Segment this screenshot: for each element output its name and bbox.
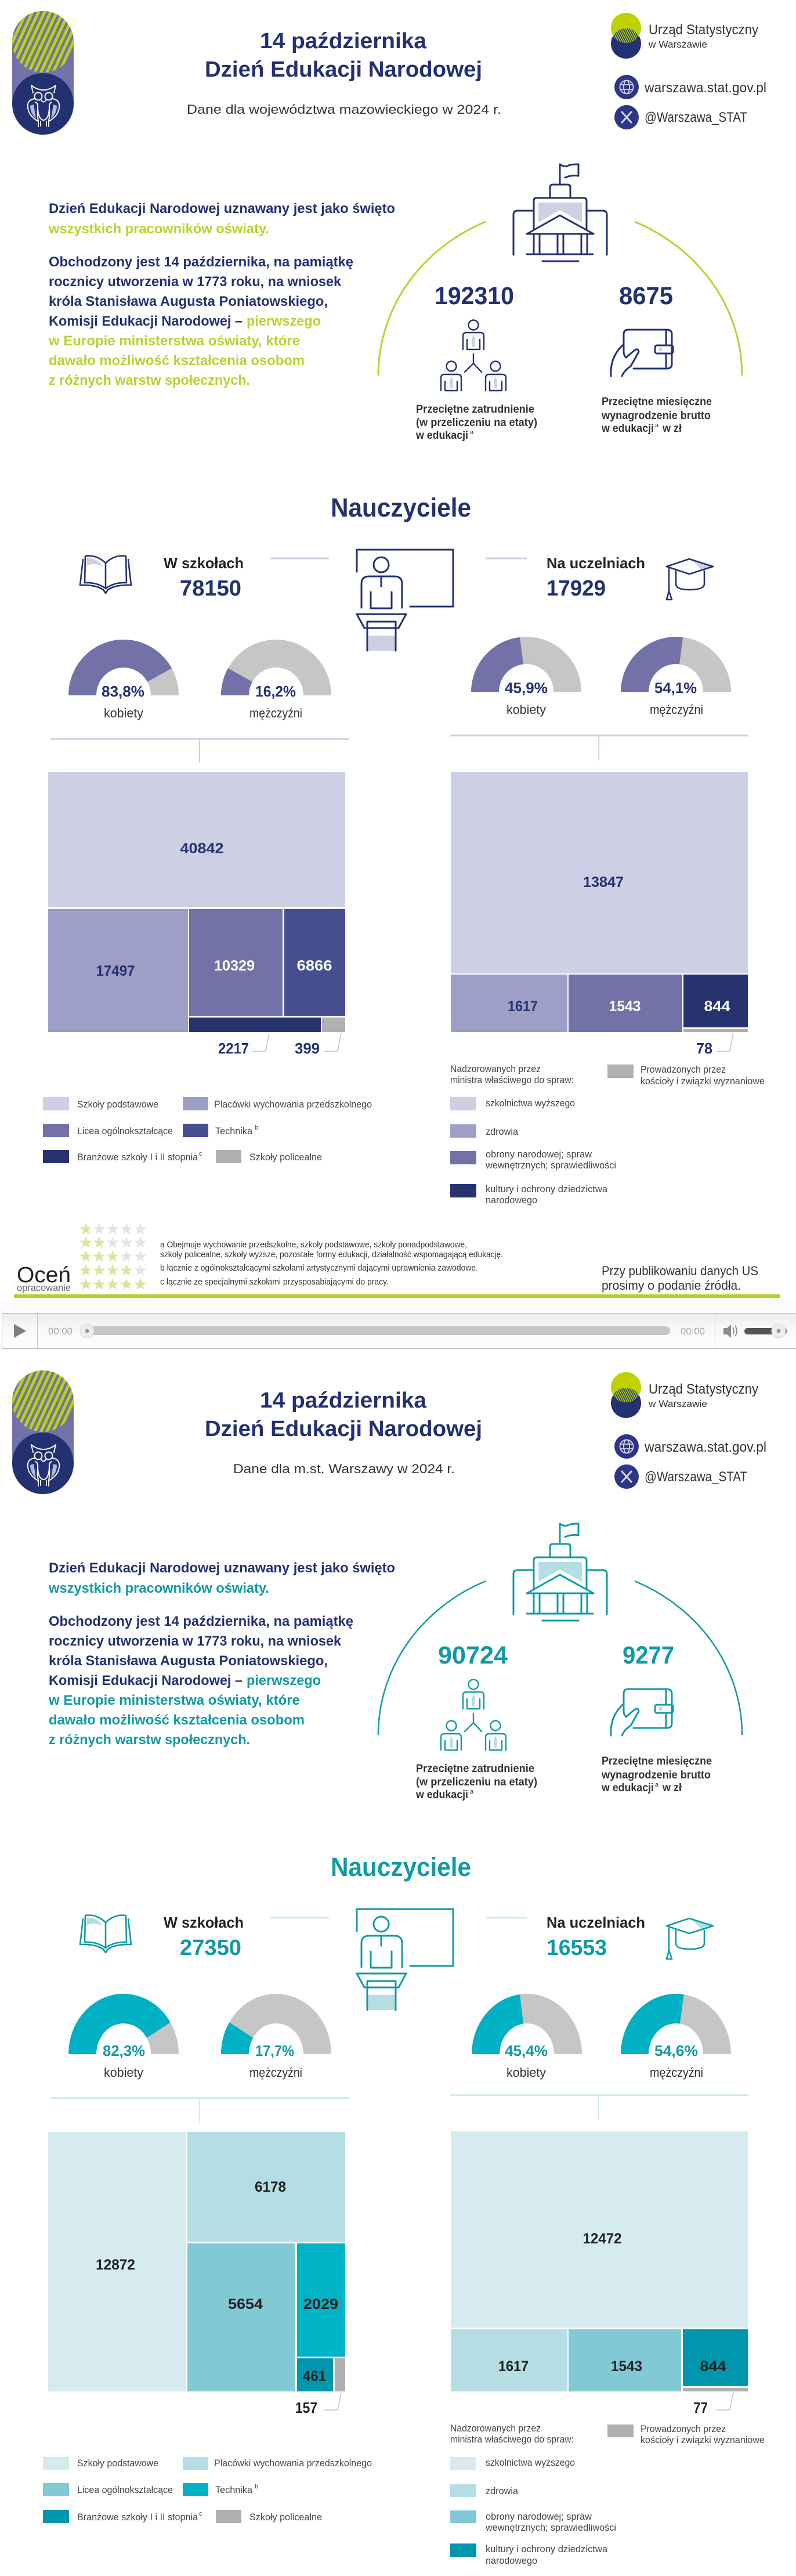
text block: intro: z różnych warstw społecznych. [49,373,250,388]
callout: 78: 78 [696,1040,712,1057]
legend: szkoły: Branżowe szkoły I i II stopnia [77,1152,198,1163]
legend: uczelnie: wewnętrznych; sprawiedliwości [485,1160,616,1171]
text block: intro: dawało możliwość kształcenia osobom [49,353,305,369]
icon: teacher at blackboard [357,1909,453,2010]
text block: intro [48,1560,395,1748]
icon: book [80,1915,131,1953]
gauge: kobiety uczelnie [471,637,581,717]
icon: book [80,556,131,593]
legend: szkoły: Szkoły podstawowe [77,2458,158,2469]
subtitle: Dane dla województwa mazowieckiego w 2024 r. [187,102,501,117]
legend: uczelnie: Nadzorowanych przez [450,1063,541,1074]
title: 14 października [260,29,427,53]
callout: 77 [693,2392,733,2416]
stat: W szkołach: 78150 [180,576,241,601]
stat: employment [415,282,537,442]
treemap: szkoły [48,2132,345,2391]
stat: employment: w edukacji [415,430,468,442]
legend: uczelnie: wewnętrznych; sprawiedliwości [485,2522,616,2533]
callout: 157 [295,2392,341,2416]
footnotes: a Obejmuje wychowanie przedszkolne, szkoły podstawowe, szkoły ponadpodstawowe, [160,1240,467,1250]
treemap: szkoły: 40842 [180,840,224,857]
legend: szkoły: c [199,1150,202,1157]
gauge: mężczyźni szkoły: mężczyźni [249,706,302,720]
treemap: uczelnie [451,772,748,1032]
treemap: szkoły: 12872 [96,2257,135,2273]
treemap: uczelnie: 1617 [508,998,538,1015]
legend: szkoły: c [199,2510,202,2517]
gauge: mężczyźni uczelnie [621,637,731,717]
stat: Na uczelniach: Na uczelniach [547,554,645,572]
legend: szkoły: Szkoły policealne [249,2512,322,2523]
audio player: 00:00 [48,1326,73,1337]
gauge: kobiety szkoły [68,640,179,720]
legend: szkoły: Szkoły policealne [249,1152,322,1163]
stat: salary: a [655,422,659,429]
treemap: szkoły: 2029 [303,2296,338,2312]
legend: uczelnie: kultury i ochrony dziedzictwa [486,2543,608,2555]
source note: prosimy o podanie źródła. [602,1278,741,1293]
legend: szkoły: Branżowe szkoły I i II stopnia [77,2512,198,2523]
text block: intro: Komisji Edukacji Narodowej – [49,313,243,329]
logo and contact: Urząd Statystyczny [649,1381,758,1397]
callout: 2217 [218,1033,269,1057]
gauge: kobiety uczelnie: 45,4% [505,2042,548,2059]
gauge: mężczyźni uczelnie: 54,6% [654,2042,698,2059]
arc: right [635,222,742,376]
text block: intro: z różnych warstw społecznych. [49,1732,250,1748]
gauge: kobiety uczelnie: kobiety [506,2065,546,2080]
stat: employment: Przeciętne zatrudnienie [416,403,534,416]
legend: uczelnie: Prowadzonych przez [641,2423,726,2434]
footnotes: szkoły policealne, szkoły wyższe, pozostałe formy edukacji, działalność wspomagającą edukację. [160,1250,503,1260]
treemap: szkoły: 17497 [96,963,135,979]
gauge: kobiety szkoły: 83,8% [102,683,144,700]
stat: salary: wynagrodzenie brutto [601,410,711,422]
treemap: uczelnie: 1543 [609,998,641,1015]
footnotes: c łącznie ze specjalnymi szkołami przysposabiającymi do pracy. [160,1278,389,1287]
stat: Na uczelniach: Na uczelniach [547,1914,645,1931]
text block: intro: rocznicy utworzenia w 1773 roku, na wniosek [49,1633,342,1649]
gauge: kobiety szkoły [68,1994,179,2080]
stat: salary: w zł [662,423,682,435]
legend: szkoły: b [255,2483,258,2490]
gauge: mężczyźni uczelnie: mężczyźni [650,2065,703,2080]
callout: 78 [696,1033,733,1057]
arc: left [378,222,486,376]
gauge: kobiety uczelnie: kobiety [506,702,546,717]
icon: school building [513,164,607,261]
treemap: szkoły: 10329 [214,958,255,974]
treemap: uczelnie: 13847 [583,874,624,890]
stat: salary: 8675 [619,282,673,310]
callout: 399: 399 [295,1040,320,1057]
footnotes [160,1240,503,1287]
legend: szkoły: Licea ogólnokształcące [77,2484,173,2495]
heading: Nauczyciele: Nauczyciele [331,1852,471,1882]
stat: Na uczelniach [547,1914,645,1960]
icon: graduation cap [667,559,713,600]
icon: graduation cap [667,1918,713,1959]
logo and contact: w Warszawie [648,1398,707,1409]
stat: employment [415,1641,537,1801]
title: Dzień Edukacji Narodowej [205,1417,482,1441]
stat: salary: a [655,1781,659,1788]
treemap: szkoły [48,772,345,1032]
legend: uczelnie [450,2423,765,2566]
arc: left [378,1581,486,1735]
stat: employment: 90724 [438,1641,508,1669]
treemap: szkoły: 461 [303,2368,326,2384]
stat: salary: Przeciętne miesięczne [602,396,712,408]
stat: Na uczelniach: 17929 [547,576,606,601]
title: Dzień Edukacji Narodowej [205,57,482,82]
text block: intro: Obchodzony jest 14 października, na pamiątkę [49,1614,353,1629]
stat: employment: (w przeliczeniu na etaty) [416,1776,537,1788]
gauge: kobiety szkoły: kobiety [104,2065,143,2080]
icon: owl badge [12,11,74,135]
stat: employment: Przeciętne zatrudnienie [416,1763,534,1775]
text block: intro: dawało możliwość kształcenia osobom [49,1712,305,1728]
audio player: 00:00 [681,1326,705,1337]
logo and contact: w Warszawie [648,39,707,50]
callout: 399 [295,1033,341,1057]
legend: uczelnie: kultury i ochrony dziedzictwa [486,1184,608,1195]
gauge: mężczyźni szkoły: mężczyźni [249,2065,302,2080]
stat: employment: 192310 [435,282,514,310]
treemap: uczelnie [451,2131,748,2391]
stat: employment: w edukacji [415,1789,468,1801]
stat: salary: w edukacji [601,1782,654,1794]
audio player [2,1313,796,1349]
stat: salary: 9277 [623,1641,674,1669]
gauge: kobiety uczelnie [472,1994,582,2080]
stat: W szkołach: W szkołach [164,554,244,572]
stat: Na uczelniach [547,554,645,601]
icon: teacher at blackboard [357,550,453,651]
treemap: szkoły: 6178 [255,2179,286,2195]
text block: intro: w Europie ministerstwa oświaty, które [48,333,300,349]
logo and contact: Urząd Statystyczny [649,22,758,38]
stat: salary [601,1641,712,1794]
text block: intro: w Europie ministerstwa oświaty, które [48,1693,300,1708]
legend: szkoły: b [255,1124,258,1131]
treemap: uczelnie: 844 [704,998,730,1015]
legend: szkoły: Technika [215,2484,253,2495]
stat: salary: wynagrodzenie brutto [601,1769,711,1781]
callout: 2217: 2217 [218,1040,249,1057]
text block: intro: pierwszego [247,313,321,329]
treemap: uczelnie: 844 [700,2358,726,2375]
title [205,29,482,82]
stat: salary: w edukacji [601,423,654,435]
arc: right [635,1581,742,1735]
gauge: kobiety szkoły: 82,3% [103,2042,145,2059]
stat: salary: w zł [662,1782,682,1794]
gauge: kobiety uczelnie: 45,9% [505,679,548,697]
gauge: mężczyźni szkoły: 17,7% [255,2042,294,2059]
gauge: mężczyźni uczelnie [621,1994,731,2080]
rating widget [17,1223,146,1293]
stat: salary: Przeciętne miesięczne [602,1755,712,1767]
legend: uczelnie: zdrowia [486,1126,519,1137]
stat: salary [601,282,712,435]
legend: uczelnie: zdrowia [486,2485,519,2496]
text block: intro: wszystkich pracowników oświaty. [48,1581,269,1596]
stat: employment: (w przeliczeniu na etaty) [416,417,537,429]
legend: uczelnie: szkolnictwa wyższego [486,2457,575,2468]
stat: W szkołach [164,554,244,601]
rating widget: opracowanie [17,1282,71,1293]
stat: W szkołach [164,1914,244,1960]
panel: województwo mazowieckie [12,11,780,1298]
logo and contact: warszawa.stat.gov.pl [644,1439,766,1455]
legend: uczelnie: Nadzorowanych przez [450,2423,541,2434]
legend: uczelnie [450,1063,765,1206]
logo and contact: @Warszawa_STAT [645,1469,747,1485]
gauge: mężczyźni szkoły: 16,2% [255,683,296,700]
legend: uczelnie: Prowadzonych przez [641,1064,726,1075]
legend: szkoły: Licea ogólnokształcące [77,1125,173,1137]
title: 14 października [260,1388,427,1413]
source note: Przy publikowaniu danych US [602,1264,758,1278]
rating widget: Oceń [17,1263,71,1287]
stat: W szkołach: 27350 [180,1936,241,1960]
text block: intro: wszystkich pracowników oświaty. [48,221,269,237]
legend: uczelnie: kościoły i związki wyznaniowe [641,2434,765,2445]
text block: intro: Komisji Edukacji Narodowej – [49,1673,243,1689]
logo and contact: @Warszawa_STAT [645,110,747,125]
text block: intro: Dzień Edukacji Narodowej uznawany jest jako święto [49,201,395,217]
source note [602,1264,758,1293]
subtitle: Dane dla m.st. Warszawy w 2024 r. [233,1462,455,1476]
legend: uczelnie: szkolnictwa wyższego [486,1098,575,1109]
icon: owl badge [12,1370,74,1494]
legend: uczelnie: narodowego [486,2555,537,2566]
stat: Na uczelniach: 16553 [547,1936,607,1960]
footnotes: b łącznie z ogólnokształcącymi szkołami artystycznymi dającymi uprawnienia zawodowe. [160,1264,478,1273]
text block: intro: pierwszego [247,1673,321,1689]
stat: employment: a [470,1788,474,1795]
legend: uczelnie: kościoły i związki wyznaniowe [641,1076,765,1087]
treemap: szkoły: 6866 [297,958,332,974]
callout: 77: 77 [693,2399,708,2416]
callout: 157: 157 [295,2399,317,2416]
icon: school building [513,1524,607,1621]
text block: intro: rocznicy utworzenia w 1773 roku, na wniosek [49,274,342,290]
treemap: uczelnie: 1617 [498,2358,529,2375]
gauge: mężczyźni szkoły [221,1994,331,2080]
logo and contact [611,13,766,129]
text block: intro [48,201,395,388]
stat: employment: a [470,429,474,436]
logo and contact: warszawa.stat.gov.pl [644,80,766,96]
heading: Nauczyciele: Nauczyciele [331,493,471,522]
gauge: mężczyźni szkoły [221,640,331,720]
legend: szkoły: Technika [215,1125,253,1137]
legend: szkoły: Szkoły podstawowe [77,1099,158,1110]
gauge: mężczyźni uczelnie: mężczyźni [650,702,703,717]
stat: W szkołach: W szkołach [164,1914,244,1931]
legend: uczelnie: ministra właściwego do spraw: [450,1074,574,1085]
legend: szkoły [43,1097,372,1163]
legend: uczelnie: obrony narodowej; spraw [486,1149,592,1160]
legend: uczelnie: ministra właściwego do spraw: [450,2434,574,2445]
treemap: uczelnie: 12472 [582,2231,622,2247]
legend: szkoły: Placówki wychowania przedszkolnego [214,1099,372,1110]
legend: uczelnie: obrony narodowej; spraw [486,2511,592,2522]
title [205,1388,482,1441]
text block: intro: króla Stanisława Augusta Poniatowskiego, [49,294,328,309]
gauge: kobiety szkoły: kobiety [104,706,143,720]
treemap: uczelnie: 1543 [611,2358,642,2375]
gauge: mężczyźni uczelnie: 54,1% [654,679,697,697]
legend: uczelnie: narodowego [486,1195,537,1206]
legend: szkoły [43,2457,372,2523]
logo and contact [611,1372,766,1489]
panel: m.st. Warszawa [12,1370,766,2566]
text block: intro: króla Stanisława Augusta Poniatowskiego, [49,1653,328,1669]
treemap: szkoły: 5654 [228,2296,263,2312]
text block: intro: Dzień Edukacji Narodowej uznawany jest jako święto [49,1560,395,1576]
legend: szkoły: Placówki wychowania przedszkolnego [214,2458,372,2469]
text block: intro: Obchodzony jest 14 października, na pamiątkę [49,254,353,270]
